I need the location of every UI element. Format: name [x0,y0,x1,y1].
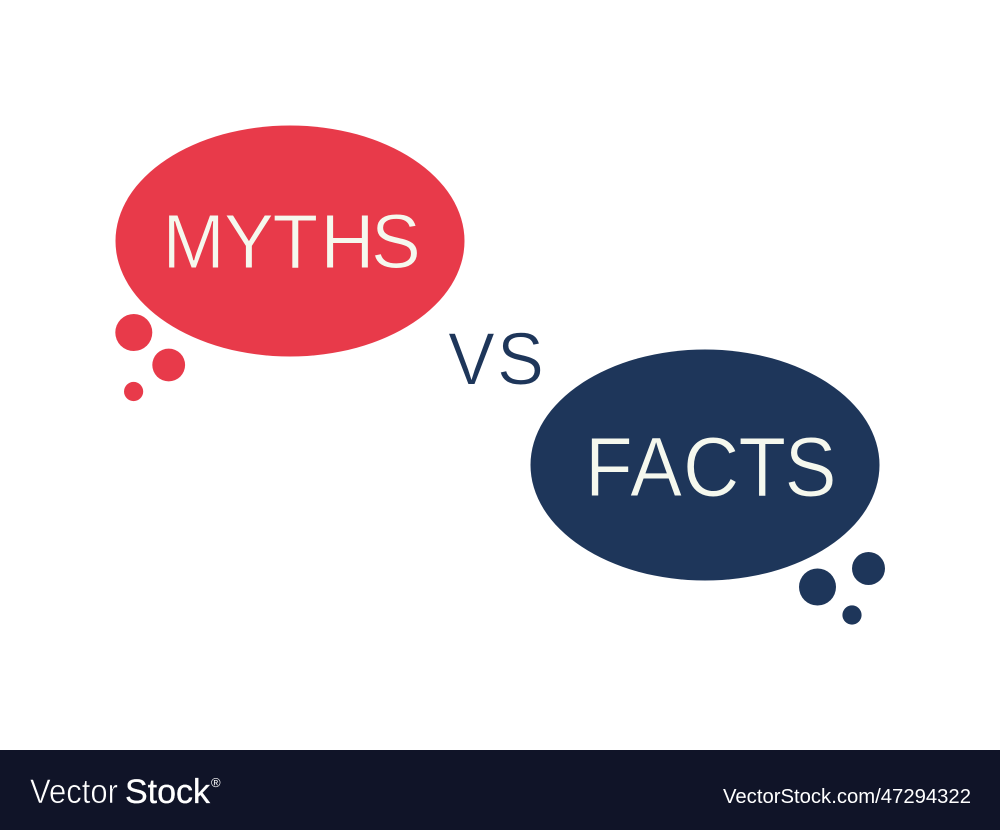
image id: VectorStock.com/47294322 [723,786,971,808]
facts thought dots [799,552,885,625]
myths speech bubble [116,126,464,356]
watermark logo: Stock [125,773,211,811]
watermark logo [30,773,221,811]
vs label: VS [448,319,544,401]
watermark logo: ® [211,775,221,790]
watermark logo: Vector [30,773,118,811]
myths thought dots [115,314,185,401]
facts label: FACTS [585,421,837,515]
myths label: MYTHS [162,199,421,285]
facts speech bubble [530,350,880,580]
footer bar [0,750,1000,830]
